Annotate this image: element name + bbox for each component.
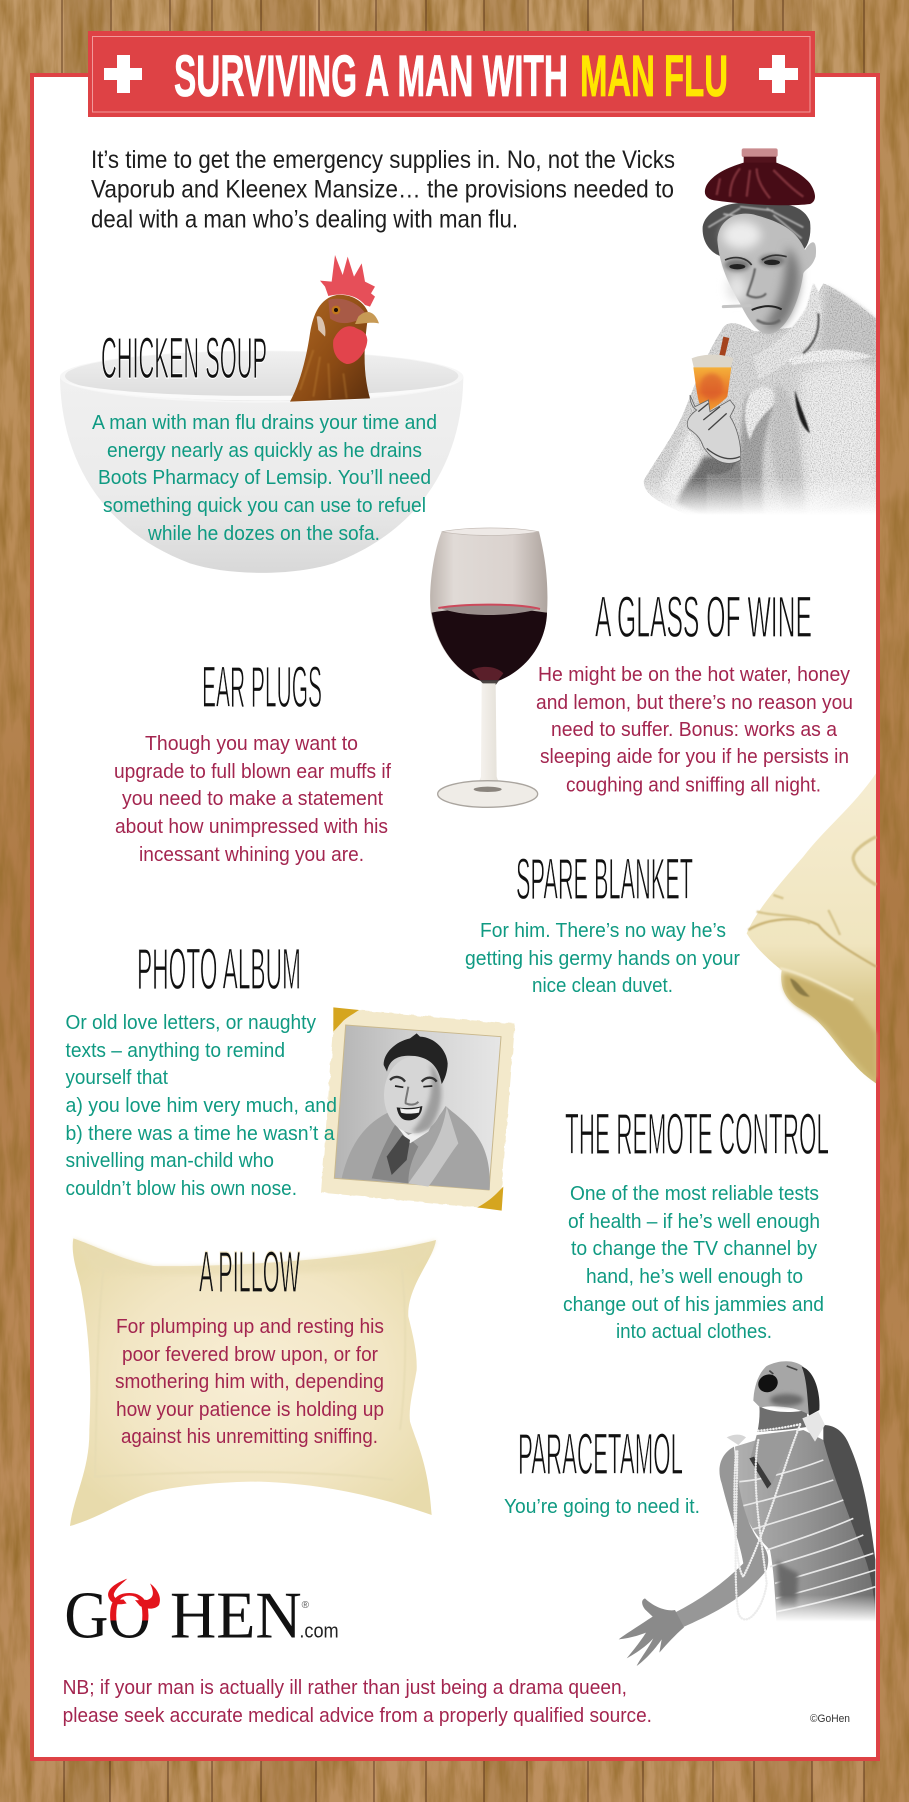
- illustration: blanket: [747, 773, 876, 1083]
- panel: chicken soup: [60, 255, 463, 573]
- illustration: chicken: [290, 255, 379, 402]
- panel: chicken soup: CHICKEN SOUP: [101, 326, 267, 391]
- hand holding drink: [687, 395, 741, 463]
- intro text: Vaporub and Kleenex Mansize… the provisions needed to: [91, 176, 674, 204]
- body text: chicken soup: [92, 411, 437, 545]
- logo letter G: G: [64, 1580, 108, 1653]
- illustration: framed photo: [321, 1007, 515, 1211]
- body text: ear plugs: [114, 732, 391, 866]
- body text: ear plugs: upgrade to full blown ear muffs if: [114, 760, 391, 783]
- panel: ear plugs: [114, 655, 391, 866]
- logo letter O with red top: O: [108, 1580, 151, 1653]
- body text: ear plugs: incessant whining you are.: [139, 843, 364, 866]
- logo registered mark: ®: [302, 1600, 310, 1611]
- body text: photo album: [66, 1011, 337, 1200]
- logo horns: [108, 1579, 160, 1609]
- intro text: It’s time to get the emergency supplies in. No, not the Vicks: [91, 146, 675, 174]
- thermometer: [723, 306, 750, 307]
- illustration: bowl: [60, 351, 463, 573]
- bows and pearl necklace: [727, 1412, 825, 1619]
- body text: the remote control: [563, 1182, 824, 1343]
- body text: a glass of wine: [536, 663, 853, 796]
- panel: a pillow: A PILLOW: [199, 1240, 300, 1305]
- body text: a glass of wine: coughing and sniffing all night.: [566, 774, 821, 796]
- body text: a pillow: [115, 1315, 384, 1448]
- body text: ear plugs: about how unimpressed with his: [115, 815, 388, 838]
- laughing man: [342, 1033, 490, 1190]
- logo word HEN: HEN: [170, 1580, 302, 1653]
- body text: a glass of wine: need to suffer. Bonus: works as a: [551, 718, 838, 741]
- medical disclaimer note: [63, 1676, 652, 1727]
- body text: photo album: couldn’t blow his own nose.: [66, 1177, 297, 1200]
- body text: ear plugs: you need to make a statement: [122, 787, 383, 810]
- body text: the remote control: to change the TV channel by: [571, 1237, 818, 1260]
- body text: photo album: yourself that: [66, 1066, 168, 1089]
- body text: photo album: Or old love letters, or naughty: [66, 1011, 317, 1034]
- body text: photo album: snivelling man-child who: [66, 1149, 274, 1172]
- body text: spare blanket: [465, 919, 740, 997]
- body text: chicken soup: something quick you can use to refuel: [103, 494, 426, 517]
- body text: a glass of wine: sleeping aide for you if he persists in: [540, 745, 849, 768]
- body text: a pillow: For plumping up and resting his: [116, 1315, 384, 1338]
- title text yellow: MAN FLU: [580, 44, 728, 109]
- icon: right medical cross: [759, 55, 798, 93]
- panel: spare blanket: [465, 773, 876, 1083]
- woman's arm and hand: [619, 1447, 768, 1666]
- body text: chicken soup: A man with man flu drains your time and: [92, 411, 437, 434]
- panel: photo album: [66, 937, 515, 1211]
- body text: photo album: a) you love him very much, and: [66, 1094, 337, 1117]
- intro text: deal with a man who’s dealing with man flu.: [91, 206, 518, 234]
- panel: photo album: PHOTO ALBUM: [137, 937, 301, 1002]
- body text: chicken soup: Boots Pharmacy of Lemsip. You’ll need: [98, 466, 431, 489]
- title text white: SURVIVING A MAN WITH: [174, 44, 568, 109]
- panel: the remote control: [563, 1102, 829, 1343]
- body text: spare blanket: getting his germy hands on your: [465, 947, 740, 970]
- body text: chicken soup: while he dozes on the sofa.: [147, 522, 380, 545]
- panel: ear plugs: EAR PLUGS: [202, 655, 322, 720]
- logo dot com: .com: [299, 1621, 339, 1643]
- body text: the remote control: change out of his jammies and: [563, 1293, 824, 1316]
- copyright: ©GoHen: [810, 1713, 850, 1725]
- body text: a pillow: how your patience is holding up: [116, 1398, 384, 1421]
- body text: spare blanket: For him. There’s no way he’s: [480, 919, 726, 942]
- body text: a pillow: smothering him with, depending: [115, 1370, 384, 1393]
- logo: GoHen: [64, 1579, 339, 1653]
- illustration: wine glass: [430, 528, 547, 807]
- intro text: [91, 146, 675, 234]
- head and face: [703, 203, 816, 334]
- illustration: screaming woman: [619, 1361, 875, 1666]
- body text: the remote control: into actual clothes.: [616, 1320, 772, 1343]
- body text: paracetamol: You’re going to need it.: [504, 1495, 700, 1518]
- body text: a glass of wine: He might be on the hot water, honey: [538, 663, 851, 686]
- body text: the remote control: of health – if he’s well enough: [568, 1210, 820, 1233]
- body text: chicken soup: energy nearly as quickly as he drains: [107, 439, 422, 462]
- body text: ear plugs: Though you may want to: [145, 732, 358, 755]
- body text: the remote control: One of the most reliable tests: [570, 1182, 819, 1205]
- illustration: pillow: [70, 1238, 436, 1526]
- panel: paracetamol: [504, 1361, 875, 1666]
- body text: the remote control: hand, he’s well enough to: [586, 1265, 803, 1288]
- body text: a pillow: poor fevered brow upon, or for: [122, 1343, 378, 1366]
- medical disclaimer note: NB; if your man is actually ill rather than just being a drama queen,: [63, 1676, 627, 1699]
- body text: spare blanket: nice clean duvet.: [532, 974, 673, 997]
- body text: photo album: b) there was a time he wasn’t a: [66, 1122, 335, 1145]
- hot drink glass: [692, 337, 733, 413]
- title banner: [88, 31, 815, 117]
- icon: left medical cross: [104, 55, 142, 93]
- medical disclaimer note: please seek accurate medical advice from a properly qualified source.: [63, 1704, 652, 1727]
- panel: a pillow: [70, 1238, 436, 1526]
- body text: a pillow: against his unremitting sniffing.: [121, 1425, 378, 1448]
- gold photo corners: [333, 1007, 359, 1032]
- woman's head: [753, 1361, 819, 1432]
- ice bag: [705, 148, 815, 205]
- illustration: man with ice bag, blanket and hot drink: [644, 148, 876, 520]
- body text: a glass of wine: and lemon, but there’s no reason you: [536, 691, 853, 714]
- body text: photo album: texts – anything to remind: [66, 1039, 285, 1062]
- panel: glass of wine: [430, 528, 853, 807]
